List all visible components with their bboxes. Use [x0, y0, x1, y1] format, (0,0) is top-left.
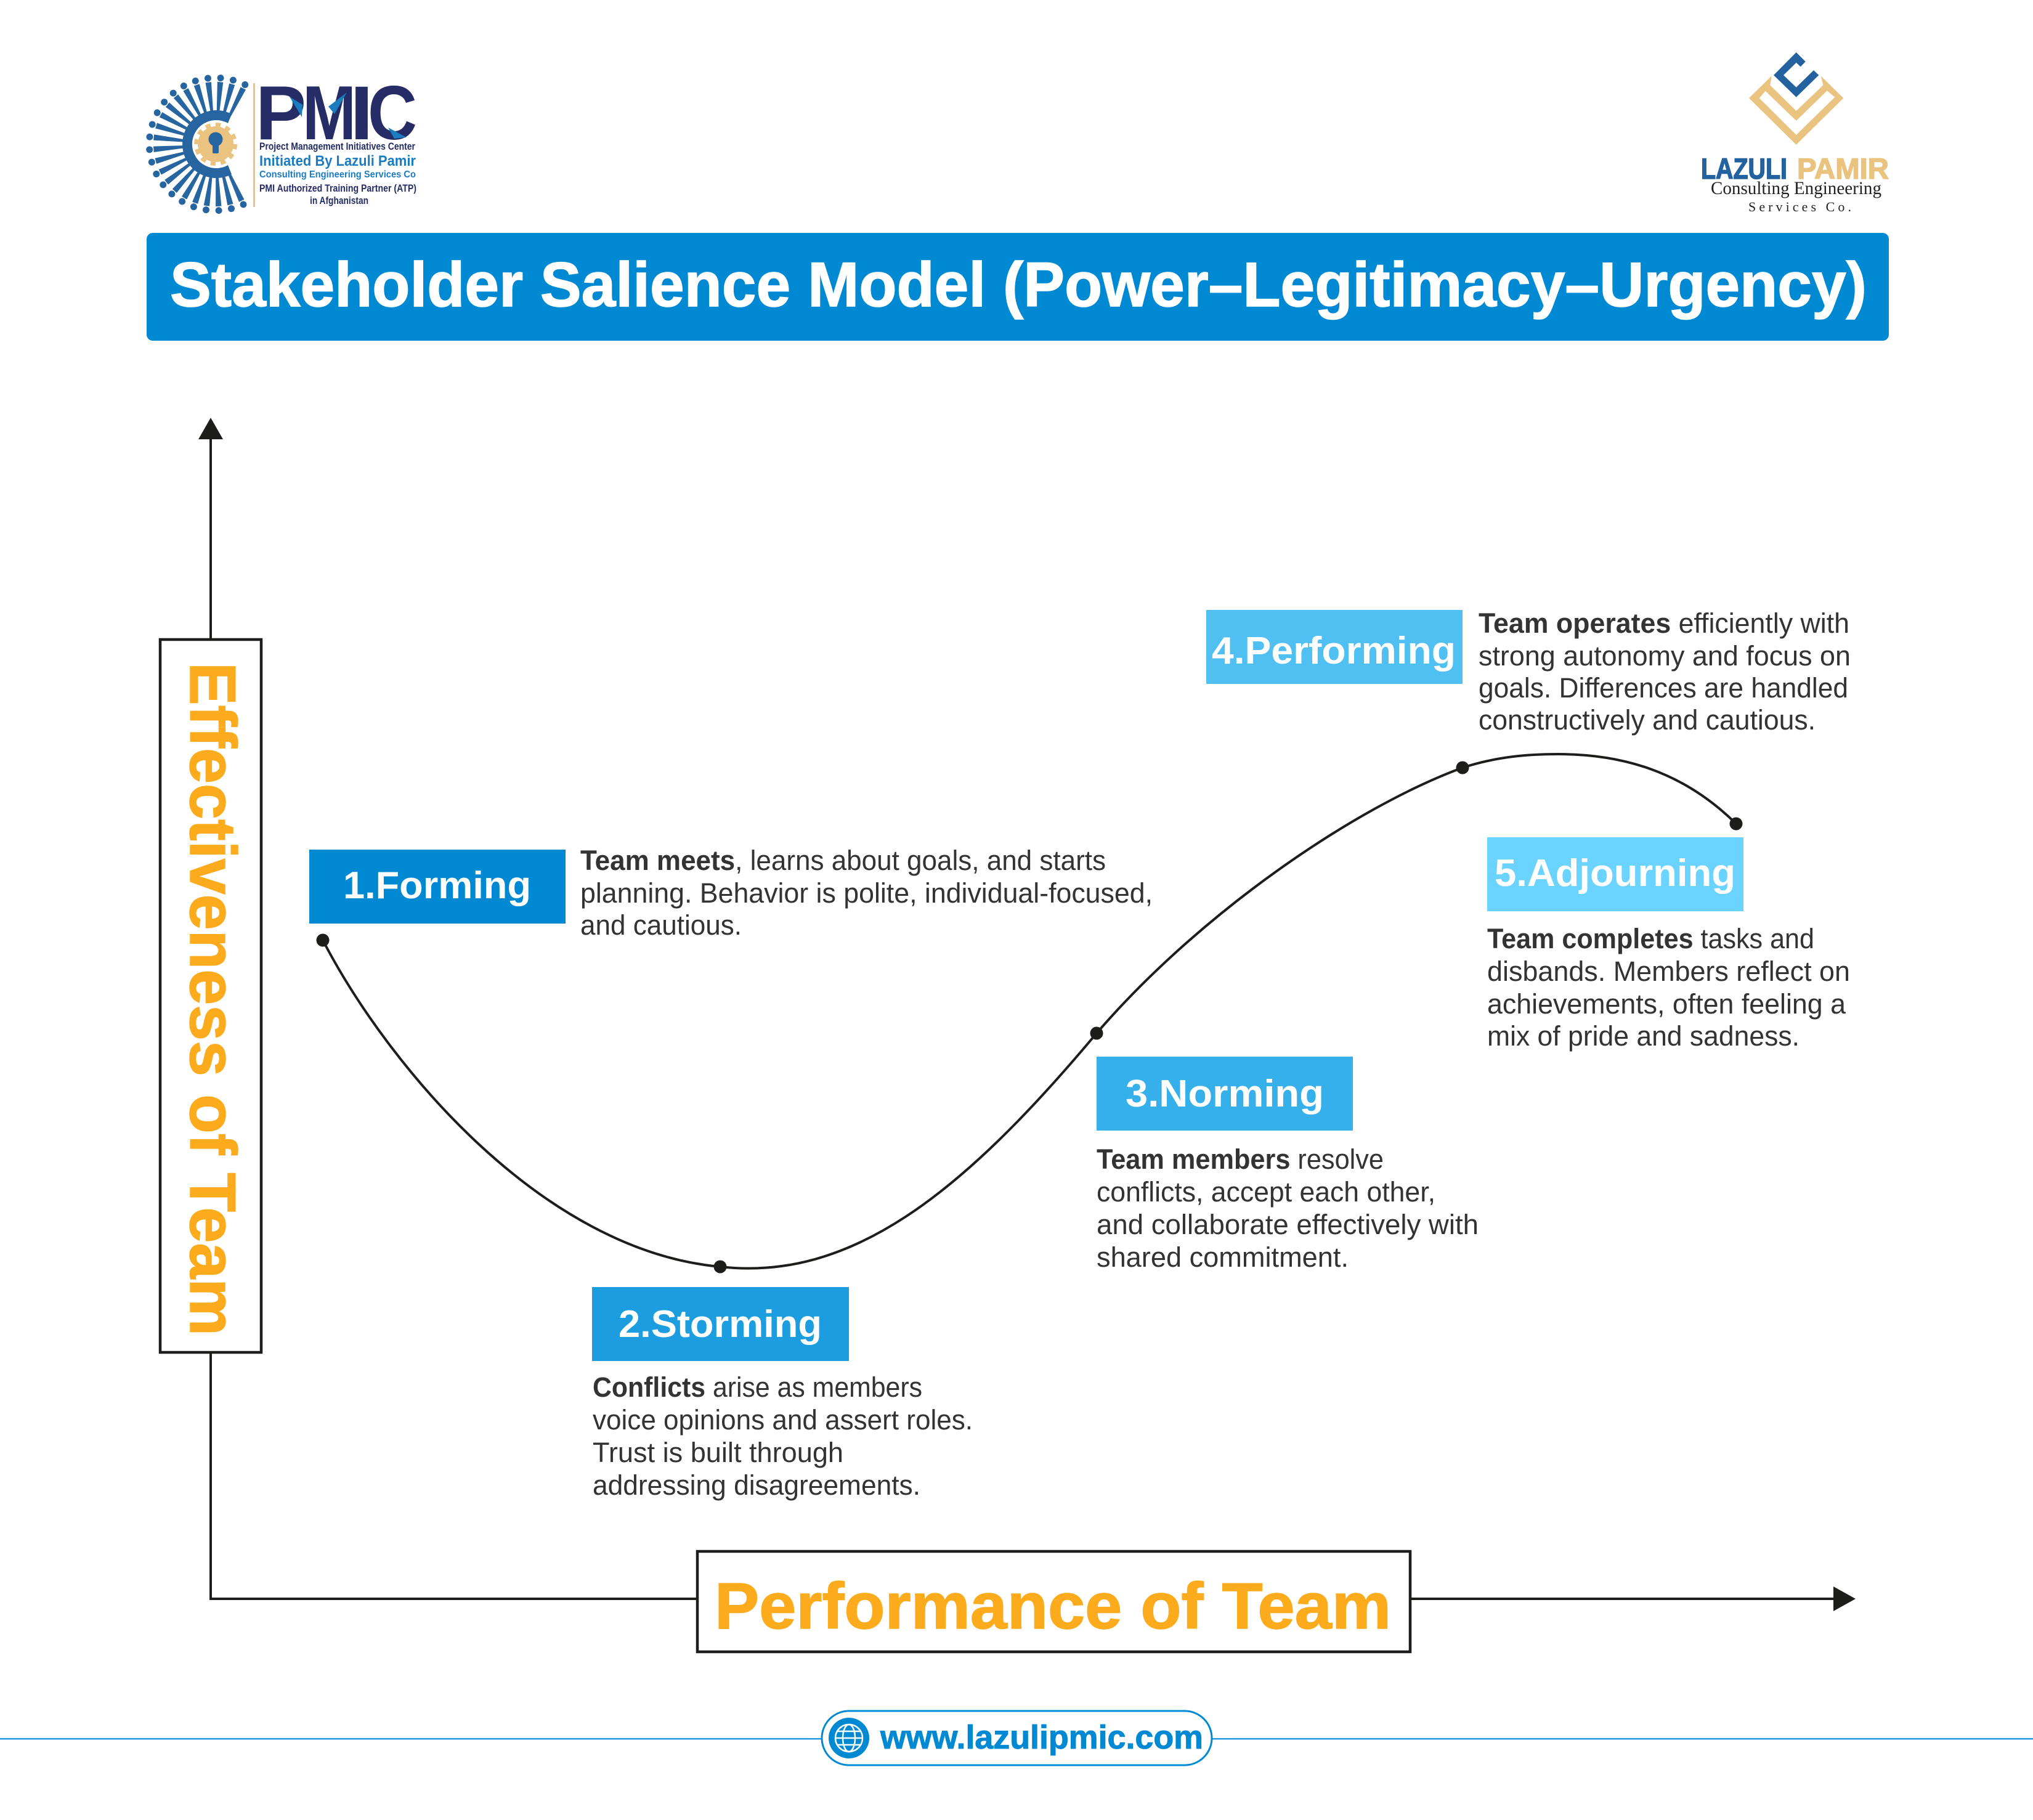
- Lazuli Pamir tagline: Services Co.: [1748, 199, 1851, 214]
- label: Forming: 1.Forming: [343, 864, 531, 907]
- label: Performing: 4.Performing: [1212, 630, 1456, 672]
- PMIC wordmark: C: [368, 71, 417, 156]
- text: Performing description: goals. Differences are handled: [1479, 672, 1848, 704]
- label: Adjourning: [1487, 837, 1743, 911]
- text: Storming description: Conflicts arise as members: [593, 1371, 922, 1403]
- y axis label: [160, 640, 261, 1352]
- Lazuli Pamir wordmark: [1701, 152, 1889, 185]
- text: Forming description: [580, 845, 1153, 941]
- text: Norming description: conflicts, accept each other,: [1097, 1176, 1435, 1208]
- text: Norming description: Team members resolve: [1097, 1144, 1384, 1175]
- team performance curve: [317, 754, 1742, 1273]
- text: Adjourning description: disbands. Members reflect on: [1487, 956, 1850, 987]
- Lazuli Pamir tagline: Consulting Engineering: [1711, 178, 1881, 198]
- label: Norming: [1097, 1057, 1353, 1131]
- text: Forming description: Team meets, learns about goals, and starts: [580, 845, 1106, 876]
- text: Adjourning description: Team completes tasks and: [1487, 923, 1814, 954]
- stage 2: Storming: [592, 1287, 973, 1501]
- footer website: [0, 1711, 2033, 1765]
- website url: www.lazulipmic.com: [880, 1719, 1203, 1756]
- title banner: [147, 233, 1889, 341]
- PMIC tagline: Project Management Initiatives Center: [259, 140, 415, 152]
- text: Adjourning description: achievements, often feeling a: [1487, 988, 1846, 1020]
- PMIC tagline: Initiated By Lazuli Pamir: [259, 153, 416, 169]
- label: Adjourning: 5.Adjourning: [1495, 852, 1735, 895]
- PMIC wordmark: [256, 71, 417, 156]
- text: Storming description: [593, 1371, 973, 1501]
- text: Adjourning description: mix of pride and sadness.: [1487, 1020, 1800, 1052]
- y axis label: Effectiveness of Team: [176, 662, 249, 1336]
- icon: diamond mark: [1749, 52, 1843, 145]
- text: Norming description: and collaborate effectively with: [1097, 1209, 1479, 1240]
- text: Adjourning description: [1487, 923, 1850, 1052]
- Lazuli Pamir wordmark: PAMIR: [1797, 152, 1889, 185]
- text: Storming description: voice opinions and assert roles.: [593, 1404, 973, 1436]
- PMIC wordmark: P: [256, 71, 306, 156]
- Lazuli Pamir wordmark: LAZULI: [1701, 152, 1787, 185]
- text: Performing description: constructively and cautious.: [1479, 704, 1816, 736]
- label: Norming: 3.Norming: [1126, 1073, 1324, 1115]
- label: Forming: [309, 850, 566, 924]
- Lazuli Pamir tagline: [1711, 178, 1881, 214]
- text: Performing description: Team operates efficiently with: [1479, 607, 1849, 639]
- arrow: y axis: [198, 418, 223, 439]
- logo: PMIC: [146, 71, 417, 214]
- text: Forming description: and cautious.: [580, 909, 742, 941]
- text: Performing description: strong autonomy and focus on: [1479, 640, 1851, 672]
- PMIC tagline: Consulting Engineering Services Co: [259, 169, 416, 180]
- x axis label: [697, 1551, 1410, 1652]
- arrow: x axis: [1833, 1586, 1856, 1611]
- PMIC wordmark: I: [350, 71, 373, 156]
- text: Norming description: [1097, 1144, 1479, 1273]
- text: Storming description: addressing disagreements.: [593, 1469, 920, 1501]
- PMIC tagline: [259, 140, 416, 206]
- text: Performing description: [1479, 607, 1851, 736]
- text: Storming description: Trust is built through: [593, 1437, 843, 1468]
- text: Norming description: shared commitment.: [1097, 1241, 1349, 1273]
- label: Storming: [592, 1287, 849, 1361]
- title banner: Stakeholder Salience Model (Power–Legitimacy–Urgency): [170, 250, 1867, 320]
- stage 5: Adjourning: [1487, 837, 1850, 1052]
- PMIC wordmark: M: [302, 71, 356, 156]
- text: Forming description: planning. Behavior is polite, individual-focused,: [580, 877, 1153, 909]
- icon: radial burst: [146, 75, 250, 214]
- stage 1: Forming: [309, 845, 1153, 941]
- chart axes: [198, 418, 1856, 1611]
- icon: gear with bulb: [197, 125, 235, 163]
- label: Performing: [1206, 610, 1463, 684]
- icon: globe: [829, 1718, 869, 1758]
- stage 3: Norming: [1097, 1057, 1479, 1273]
- stage 4: Performing: [1206, 607, 1851, 736]
- x axis label: Performance of Team: [715, 1570, 1391, 1643]
- label: Storming: 2.Storming: [619, 1303, 822, 1346]
- logo: Lazuli Pamir: [1701, 52, 1889, 214]
- PMIC tagline: PMI Authorized Training Partner (ATP): [259, 182, 416, 194]
- PMIC tagline: in Afghanistan: [310, 195, 368, 206]
